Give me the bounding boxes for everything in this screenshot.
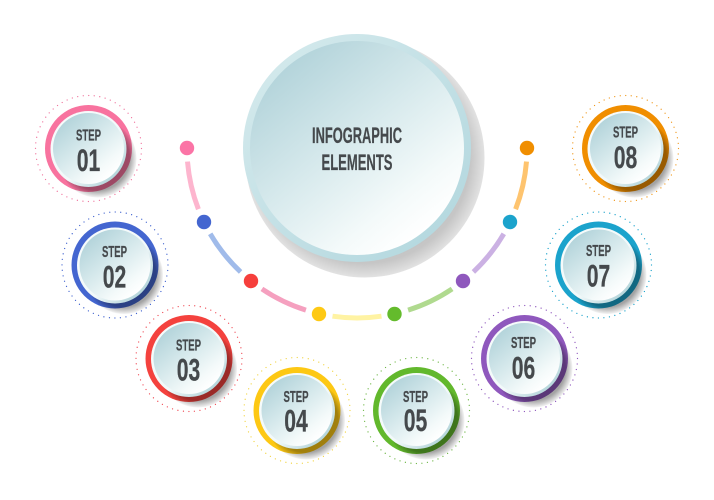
central title: ELEMENTS <box>322 150 392 175</box>
step 03: 03 <box>177 352 200 388</box>
step 06 <box>472 306 578 412</box>
central title <box>312 123 402 175</box>
step 06: 06 <box>512 350 535 386</box>
central title: INFOGRAPHIC <box>312 123 402 148</box>
step 03: STEP <box>176 338 201 354</box>
step 04: STEP <box>284 389 309 406</box>
step 02: 02 <box>103 258 126 294</box>
step 08 <box>572 96 678 202</box>
arc timeline <box>180 141 534 321</box>
step 01: 01 <box>77 142 100 178</box>
step 03 <box>136 306 242 412</box>
step 08: STEP <box>613 124 638 142</box>
step 04: 04 <box>284 402 308 438</box>
step 02 <box>62 212 168 318</box>
step 07: 07 <box>587 258 610 294</box>
step 01: STEP <box>76 128 101 144</box>
step 01 <box>36 96 142 202</box>
step 08: 08 <box>614 139 637 175</box>
step 07 <box>546 212 652 318</box>
step 04 <box>244 358 350 464</box>
step 06: STEP <box>511 335 536 352</box>
step 07: STEP <box>586 243 611 260</box>
step 05: 05 <box>404 402 427 438</box>
step 05 <box>364 358 470 464</box>
central circle <box>243 34 484 278</box>
step 05: STEP <box>403 389 428 406</box>
step 02: STEP <box>102 244 127 261</box>
